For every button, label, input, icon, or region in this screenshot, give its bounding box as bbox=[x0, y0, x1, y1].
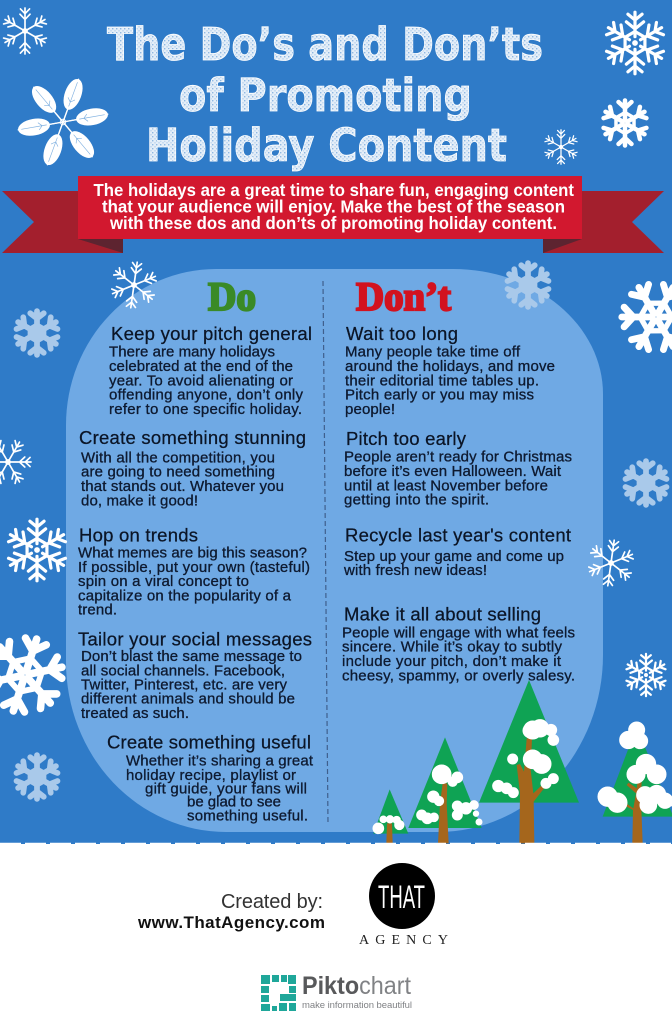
created by credit bbox=[137, 891, 325, 932]
item: wait too long: Pitch early or you may miss bbox=[345, 387, 534, 404]
title: of Promoting bbox=[179, 69, 472, 122]
item: wait too long: around the holidays, and move bbox=[345, 358, 555, 375]
item: tailor your social messages: Don’t blast the same message to bbox=[81, 648, 302, 665]
item: create something useful: be glad to see bbox=[187, 793, 281, 810]
item: wait too long: Many people take time off bbox=[345, 344, 521, 361]
tree 2 bbox=[408, 737, 482, 843]
title: The Do’s and Don’ts bbox=[107, 18, 543, 71]
item: make it all about selling: Make it all about selling bbox=[344, 604, 541, 625]
item: keep your pitch general: offending anyone, don’t only bbox=[109, 387, 304, 404]
item: keep your pitch general: year. To avoid alienating or bbox=[109, 372, 293, 389]
item: hop on trends: What memes are big this season? bbox=[78, 545, 307, 562]
item: tailor your social messages: Twitter, Pinterest, etc. are very bbox=[81, 676, 288, 693]
created by credit: Created by: bbox=[221, 891, 323, 913]
logo: Piktochart: make information beautiful bbox=[302, 1000, 412, 1011]
heading: Do: Do bbox=[208, 274, 256, 319]
item: hop on trends: spin on a viral concept to bbox=[78, 573, 249, 590]
item: tailor your social messages: treated as such. bbox=[81, 705, 189, 722]
snowflakes bbox=[0, 8, 672, 799]
item: hop on trends: If possible, put your own (tasteful) bbox=[78, 559, 310, 576]
item: tailor your social messages bbox=[78, 629, 312, 722]
tree 3 bbox=[479, 680, 579, 843]
item: hop on trends bbox=[78, 525, 310, 619]
item: create something useful: something useful. bbox=[187, 808, 308, 825]
item: create something stunning: Create something stunning bbox=[79, 427, 306, 448]
snow ground footer bbox=[0, 844, 672, 1024]
item: make it all about selling: include your pitch, don’t make it bbox=[342, 653, 562, 670]
item: keep your pitch general: refer to one specific holiday. bbox=[109, 401, 302, 418]
logo: Piktochart: Piktochart bbox=[302, 972, 411, 1000]
logo: Piktochart bbox=[261, 972, 412, 1011]
item: keep your pitch general: Keep your pitch general bbox=[111, 323, 312, 344]
item: recycle last year's content: Step up your game and come up bbox=[344, 548, 564, 565]
item: keep your pitch general bbox=[109, 323, 312, 418]
item: create something stunning: do, make it good! bbox=[81, 492, 198, 509]
content panel background bbox=[66, 269, 603, 832]
item: create something useful: holiday recipe, playlist or bbox=[126, 767, 296, 784]
snowy trees bbox=[373, 680, 672, 843]
item: pitch too early bbox=[344, 428, 572, 508]
tree 4 bbox=[598, 722, 672, 843]
created by credit: www.ThatAgency.com bbox=[137, 913, 325, 932]
item: pitch too early: People aren’t ready for Christmas bbox=[344, 449, 572, 466]
item: tailor your social messages: different animals and should be bbox=[81, 691, 295, 708]
tree 1 bbox=[373, 789, 408, 843]
item: wait too long bbox=[345, 323, 555, 418]
banner ribbon bbox=[2, 176, 664, 253]
item: create something useful: Whether it’s sharing a great bbox=[126, 753, 314, 770]
heading: Don't: Don’t bbox=[356, 274, 452, 319]
title bbox=[107, 18, 543, 172]
logo: That Agency: THAT bbox=[378, 879, 425, 915]
item: wait too long: Wait too long bbox=[346, 323, 458, 344]
item: wait too long: their editorial time tables up. bbox=[345, 372, 539, 389]
column divider bbox=[323, 281, 328, 824]
item: pitch too early: Pitch too early bbox=[346, 428, 467, 449]
item: hop on trends: trend. bbox=[78, 602, 117, 619]
item: tailor your social messages: Tailor your social messages bbox=[78, 629, 312, 650]
banner text bbox=[94, 180, 574, 233]
item: hop on trends: Hop on trends bbox=[79, 525, 198, 546]
item: create something useful bbox=[107, 731, 314, 825]
Do column bbox=[78, 274, 314, 825]
item: recycle last year's content bbox=[343, 525, 571, 579]
item: keep your pitch general: There are many holidays bbox=[109, 344, 275, 361]
item: hop on trends: capitalize on the popularity of a bbox=[78, 587, 292, 604]
item: tailor your social messages: all social channels. Facebook, bbox=[81, 662, 285, 679]
item: recycle last year's content: Recycle last year's content bbox=[345, 525, 571, 546]
item: create something stunning: that stands out. Whatever you bbox=[81, 478, 284, 495]
logo: That Agency bbox=[359, 863, 448, 948]
item: make it all about selling: sincere. While it’s okay to subtly bbox=[342, 639, 562, 656]
item: pitch too early: until at least November before bbox=[344, 477, 548, 494]
logo: That Agency: AGENCY bbox=[359, 933, 448, 948]
item: make it all about selling: cheesy, spammy, or overly salesy. bbox=[342, 667, 575, 684]
item: make it all about selling: People will engage with what feels bbox=[342, 624, 575, 641]
icon: piktochart mark bbox=[261, 975, 296, 1011]
item: pitch too early: before it’s even Halloween. Wait bbox=[344, 463, 562, 480]
banner text: that your audience will enjoy. Make the best of the season bbox=[102, 196, 565, 216]
item: recycle last year's content: with fresh new ideas! bbox=[343, 562, 487, 579]
banner text: with these dos and don’ts of promoting holiday content. bbox=[109, 213, 557, 233]
item: make it all about selling bbox=[342, 604, 575, 684]
title: Holiday Content bbox=[146, 119, 507, 172]
banner text: The holidays are a great time to share fun, engaging content bbox=[94, 180, 574, 200]
Don't column bbox=[342, 274, 575, 684]
item: keep your pitch general: celebrated at the end of the bbox=[109, 358, 293, 375]
item: create something useful: Create something useful bbox=[107, 731, 311, 752]
item: create something useful: gift guide, your fans will bbox=[145, 780, 307, 797]
item: create something stunning: With all the competition, you bbox=[81, 450, 275, 467]
item: create something stunning bbox=[79, 427, 306, 509]
item: wait too long: people! bbox=[345, 401, 395, 418]
item: create something stunning: are going to need something bbox=[81, 464, 275, 481]
item: pitch too early: getting into the spirit. bbox=[344, 491, 489, 508]
